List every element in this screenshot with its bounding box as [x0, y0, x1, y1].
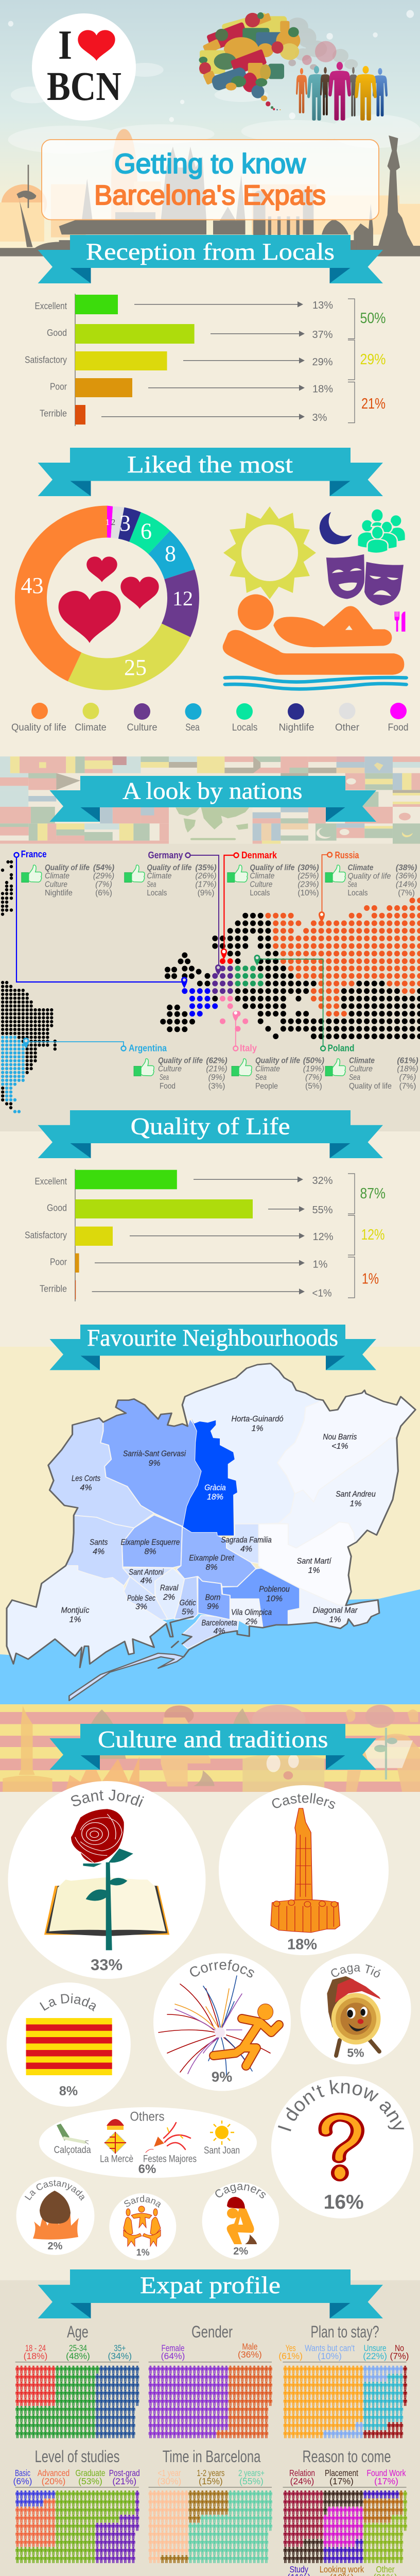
- panel: Sant Jordi: Sant Jordi: [71, 1790, 144, 1807]
- bar chart: reception from locals: Good: [47, 328, 67, 338]
- callout: Poland: Culture: [349, 1064, 373, 1074]
- map labels: 4%: [240, 1545, 252, 1554]
- chart: Level of studies: (6%): [13, 2476, 32, 2486]
- callout: Italy: (5%): [305, 1082, 322, 1091]
- chart: Plan to stay: (22%): [363, 2351, 387, 2361]
- bar chart: quality of life: 87%: [360, 1185, 386, 1202]
- title box: Barcelona's Expats: [94, 180, 326, 211]
- chart: Reason to come: Looking work: [320, 2564, 364, 2574]
- chart: Level of studies: Level of studies: [35, 2447, 119, 2466]
- chart: Level of studies: (20%): [42, 2476, 65, 2486]
- map labels: [61, 1415, 376, 1636]
- chart: Time in Barcelona: (55%): [239, 2476, 264, 2486]
- panel: Correfocs: [153, 1954, 291, 2091]
- callout: Poland: (7%): [399, 1073, 416, 1082]
- callout: Denmark: Locals: [250, 889, 270, 897]
- map labels: 1%: [329, 1615, 341, 1624]
- logo: I love BCN: I: [58, 23, 72, 68]
- callout: France: France: [21, 849, 47, 859]
- chart: Reason to come: (17%): [374, 2476, 398, 2486]
- map labels: 8%: [205, 1563, 218, 1572]
- banner: Reception from Locals: [38, 235, 383, 283]
- title box: Getting to know: [114, 148, 306, 179]
- map labels: 5%: [182, 1608, 194, 1617]
- panel: Others: Festes Majores: [143, 2154, 197, 2165]
- chart: Reason to come: [283, 2447, 407, 2576]
- chart: Age: (18%): [24, 2351, 47, 2361]
- callout: Denmark: (25%): [297, 872, 319, 880]
- map labels: 1%: [251, 1424, 264, 1433]
- callout: Russia: (14%): [396, 880, 417, 889]
- map: sea water: [0, 1589, 420, 1704]
- chart: Plan to stay: Wants but can't: [305, 2343, 355, 2353]
- bar chart: quality of life: <1%: [312, 1288, 332, 1299]
- panel: Sardana: [109, 2193, 176, 2260]
- legend: liked the most: Quality of life: [11, 722, 66, 733]
- chart: Level of studies: Advanced: [38, 2468, 69, 2478]
- donut chart: liked the most: [15, 505, 199, 690]
- map labels: Eixample Esquerre: [120, 1538, 180, 1547]
- chart: Gender: (36%): [238, 2349, 262, 2360]
- panel: Others: La Mercè: [100, 2154, 133, 2165]
- chart: Gender: Female: [162, 2343, 184, 2353]
- banner: Expat profile: [38, 2269, 383, 2318]
- chart: Reason to come: Study: [289, 2564, 308, 2574]
- bar chart: reception from locals: Terrible: [40, 409, 67, 419]
- chart: Plan to stay: (61%): [278, 2351, 303, 2361]
- callout: Denmark: (23%): [297, 880, 319, 889]
- map labels: Nou Barris: [323, 1433, 357, 1442]
- panel: La Castanyada: 2%: [48, 2241, 63, 2252]
- bar chart: quality of life: 55%: [312, 1205, 333, 1216]
- chart: Level of studies: [13, 2447, 140, 2563]
- panel: Sant Jordi: 33%: [91, 1956, 122, 1974]
- legend: liked the most: Other: [335, 722, 360, 733]
- banner: Liked the most: [38, 448, 383, 496]
- chart: Age: (34%): [108, 2351, 132, 2361]
- legend: liked the most: Climate: [75, 722, 107, 733]
- map labels: <1%: [331, 1442, 348, 1451]
- panel: Others: Others: [130, 2110, 165, 2124]
- donut chart: liked the most: 12: [172, 587, 193, 610]
- chart: Level of studies: Post-grad: [109, 2468, 140, 2478]
- chart: Reason to come: (24%): [290, 2476, 314, 2486]
- panel: Others: 6%: [138, 2162, 156, 2176]
- map labels: Sants: [90, 1538, 108, 1547]
- donut chart: liked the most: 8: [165, 541, 176, 566]
- callout: Russia: Locals: [348, 889, 368, 897]
- map labels: Eixample Dret: [189, 1554, 234, 1563]
- chart: Time in Barcelona: (15%): [199, 2476, 223, 2486]
- chart: Time in Barcelona: 2 years+: [238, 2468, 265, 2478]
- chart: Reason to come: Relation: [289, 2468, 315, 2478]
- map labels: 10%: [266, 1595, 283, 1603]
- bar chart: quality of life: Satisfactory: [25, 1230, 67, 1240]
- chart: Time in Barcelona: Time in Barcelona: [163, 2447, 260, 2466]
- panel: La Castanyada: La Castanyada: [25, 2180, 84, 2201]
- bar chart: reception from locals: 37%: [312, 329, 333, 341]
- panel: I don't know any: I don't know any: [278, 2080, 405, 2131]
- chart: Reason to come: Placement: [325, 2468, 358, 2478]
- map labels: 9%: [148, 1459, 161, 1468]
- callout: Argentina: Argentina: [129, 1043, 167, 1054]
- callout: France: Nightlife: [45, 889, 73, 897]
- banner: Culture and traditions: Culture and traditions: [98, 1726, 328, 1753]
- chart: Age: 35+: [114, 2343, 126, 2353]
- panel: Sardana: Sardana: [124, 2195, 161, 2208]
- callout: Poland: Quality of life: [349, 1082, 392, 1091]
- callout: Italy: People: [255, 1082, 278, 1091]
- panel: Caganers: 2%: [233, 2246, 248, 2257]
- callout: Argentina: Food: [160, 1082, 176, 1091]
- chart: Plan to stay: Yes: [286, 2343, 296, 2353]
- callout: Germany: Quality of life: [147, 863, 192, 872]
- callout: Argentina: Sea: [160, 1073, 169, 1082]
- banner: Favourite Neighbourhoods: [49, 1325, 376, 1370]
- callout: Argentina: Culture: [158, 1064, 182, 1074]
- panel: Caganers: [202, 2180, 279, 2260]
- callout: Italy: (50%): [303, 1056, 324, 1065]
- chart: Level of studies: Graduate: [75, 2468, 105, 2478]
- map labels: Montjuïc: [61, 1606, 90, 1615]
- map labels: Sant Antoni: [129, 1568, 164, 1577]
- callout: Russia: (38%): [396, 863, 417, 872]
- callout: Italy: Italy: [240, 1043, 257, 1054]
- bar chart: quality of life: 1%: [313, 1259, 328, 1270]
- chart: Gender: Gender: [191, 2323, 233, 2341]
- callout: Denmark: Denmark: [241, 850, 277, 860]
- callout: Poland: (61%): [397, 1056, 418, 1065]
- map labels: Gótic: [179, 1599, 196, 1607]
- bar chart: quality of life: Terrible: [40, 1283, 67, 1294]
- panel: Castellers: 18%: [287, 1937, 317, 1953]
- map labels: Barceloneta: [202, 1619, 237, 1628]
- map labels: Les Corts: [72, 1474, 100, 1483]
- bar chart: quality of life: 1%: [362, 1271, 379, 1287]
- callout: Russia: (36%): [396, 872, 417, 880]
- callout: Poland: (7%): [399, 1082, 416, 1091]
- map: Barcelona neighbourhoods: [7, 1364, 415, 1701]
- banner: Quality of Life: [38, 1110, 383, 1158]
- callout: Italy: [232, 1011, 324, 1091]
- bar chart: quality of life: 12%: [361, 1227, 385, 1243]
- banner: Reception from Locals: Reception from Locals: [86, 239, 335, 265]
- bar chart: quality of life: [25, 1169, 386, 1301]
- chart: Time in Barcelona: (30%): [157, 2476, 181, 2486]
- map labels: Sagrada Familia: [221, 1536, 272, 1545]
- map labels: 3%: [135, 1603, 147, 1612]
- callout: France: (7%): [95, 880, 112, 889]
- callout: France: (54%): [93, 863, 114, 872]
- callout: Argentina: Quality of life: [158, 1056, 203, 1065]
- title box: [42, 140, 379, 219]
- callout: Poland: (18%): [397, 1064, 418, 1074]
- map labels: 2%: [163, 1593, 175, 1602]
- chart: Time in Barcelona: <1 year: [157, 2468, 181, 2478]
- callout: Italy: Sea: [255, 1073, 267, 1082]
- banner: Culture and traditions: [49, 1724, 376, 1770]
- panel: Others: Sant Joan: [204, 2145, 240, 2156]
- map labels: Sant Martí: [297, 1557, 332, 1566]
- chart: Plan to stay: No: [395, 2343, 404, 2353]
- callout: Germany: (26%): [195, 872, 217, 880]
- map labels: Born: [205, 1594, 220, 1602]
- callout: Germany: Germany: [148, 850, 183, 860]
- map labels: 18%: [207, 1493, 223, 1502]
- chart: Gender: Male: [242, 2342, 257, 2352]
- map labels: Sarrià-Sant Gervasi: [123, 1450, 186, 1459]
- callout: Russia: Quality of life: [348, 872, 391, 881]
- callout: Germany: (17%): [195, 880, 217, 889]
- callout: France: Culture: [45, 880, 67, 889]
- callout: Denmark: Culture: [250, 880, 273, 889]
- donut chart: liked the most: 6: [141, 518, 152, 544]
- crowd of people icons: [296, 62, 388, 121]
- panel: Castellers: [219, 1785, 389, 1955]
- icon: sun: [223, 506, 316, 599]
- bar chart: reception from locals: 21%: [361, 396, 386, 412]
- panel: La Diada: 8%: [59, 2084, 78, 2098]
- icon: theatre masks: [326, 554, 404, 606]
- chart: Plan to stay: (10%): [318, 2351, 342, 2361]
- bar chart: quality of life: Good: [47, 1203, 67, 1213]
- callout: Denmark: Climate: [250, 872, 275, 880]
- callout: Russia: Climate: [348, 863, 374, 872]
- chart: Reason to come: Found Work: [366, 2468, 406, 2478]
- icon: group of locals: [357, 509, 406, 553]
- icon: moon: [320, 512, 352, 545]
- icon: sea waves: [225, 677, 406, 689]
- banner: Quality of Life: Quality of Life: [131, 1113, 290, 1140]
- icon: food fork and knife: [395, 612, 405, 632]
- bar chart: quality of life: 12%: [313, 1231, 334, 1243]
- panel: Correfocs: Correfocs: [190, 1960, 254, 1977]
- callout: Argentina: (3%): [208, 1082, 225, 1091]
- bar chart: reception from locals: 3%: [312, 412, 327, 423]
- donut chart: liked the most: 2: [111, 517, 115, 527]
- chart: Level of studies: (21%): [112, 2476, 136, 2486]
- chart: Time in Barcelona: 1-2 years: [197, 2468, 225, 2478]
- callout: Germany: (9%): [198, 889, 214, 897]
- chart: Gender: (64%): [161, 2351, 185, 2361]
- callout: Italy: Climate: [255, 1064, 280, 1074]
- callout: Denmark: [221, 850, 319, 959]
- callout: Russia: Sea: [348, 880, 357, 889]
- callout: Denmark: Quality of life: [250, 863, 295, 872]
- chart: Reason to come: Other: [376, 2564, 395, 2574]
- callout: Poland: Poland: [327, 1043, 354, 1054]
- chart: Gender: [148, 2323, 272, 2438]
- callout: Italy: (19%): [303, 1064, 324, 1074]
- chart: Level of studies: (53%): [78, 2476, 102, 2486]
- bar chart: reception from locals: 50%: [360, 310, 386, 327]
- panel: La Castanyada: [16, 2177, 95, 2255]
- bar chart: reception from locals: Excellent: [35, 301, 67, 311]
- map labels: 4%: [213, 1627, 225, 1636]
- banner: Expat profile: Expat profile: [140, 2272, 281, 2299]
- panel: Others: [39, 2107, 257, 2178]
- map labels: 1%: [308, 1566, 320, 1575]
- map labels: 4%: [80, 1484, 92, 1493]
- culture band: Catalan stripes: [0, 1704, 420, 1792]
- callout: Italy: (7%): [305, 1073, 322, 1082]
- callout: Russia: (7%): [398, 889, 415, 897]
- map labels: Horta-Guinardó: [232, 1415, 284, 1423]
- donut chart: liked the most: 1: [106, 517, 110, 527]
- icon: sunbather on lounger: [223, 595, 404, 675]
- callout: Poland: Sea: [349, 1073, 360, 1082]
- speech bubble cloud: [199, 12, 358, 110]
- panel: I don't know any: [271, 2076, 413, 2218]
- callout: Germany: (35%): [195, 863, 217, 872]
- bar chart: quality of life: Poor: [50, 1257, 67, 1267]
- chart: Plan to stay: (7%): [390, 2351, 409, 2361]
- panel: Others: Calçotada: [54, 2145, 91, 2156]
- panel: I don't know any: 16%: [324, 2191, 364, 2213]
- bar chart: quality of life: 32%: [312, 1175, 333, 1187]
- map labels: Gràcia: [204, 1484, 226, 1493]
- logo: I love BCN: [32, 13, 136, 121]
- callout: France: Climate: [45, 872, 69, 880]
- donut chart: liked the most: 3: [119, 511, 131, 536]
- map labels: 9%: [207, 1602, 219, 1611]
- callout: Germany: [125, 850, 221, 975]
- chart: Age: [15, 2323, 139, 2438]
- map labels: 1%: [69, 1615, 81, 1624]
- legend: liked the most: Nightlife: [279, 722, 314, 733]
- panel: Caga Tió: 5%: [347, 2046, 364, 2060]
- logo: I love BCN: BCN: [47, 64, 121, 109]
- legend: liked the most: Food: [388, 722, 409, 733]
- callout: Germany: Sea: [147, 880, 156, 889]
- panel: La Diada: La Diada: [40, 1993, 96, 2011]
- legend: liked the most: Locals: [232, 722, 257, 733]
- callout: Germany: Locals: [147, 889, 167, 897]
- banner: A look by nations: A look by nations: [122, 778, 303, 805]
- chart: Age: 18 - 24: [25, 2343, 46, 2353]
- dot map: world dots: [3, 862, 420, 1112]
- map labels: Diagonal Mar: [313, 1606, 358, 1615]
- callout: France: (29%): [93, 872, 114, 880]
- bar chart: reception from locals: Satisfactory: [25, 355, 67, 365]
- panel: Caganers: Caganers: [215, 2183, 266, 2198]
- flags background band: [0, 756, 420, 844]
- panel: Castellers: Castellers: [272, 1793, 336, 1809]
- chart: Age: Age: [67, 2323, 89, 2341]
- chart: Plan to stay: [278, 2323, 409, 2438]
- chart: Age: 25-34: [69, 2343, 87, 2353]
- callout: Denmark: (30%): [297, 863, 319, 872]
- panel: Sardana: 1%: [136, 2247, 150, 2258]
- banner: Favourite Neighbourhoods: Favourite Neighbourhoods: [87, 1325, 338, 1351]
- callout: Argentina: (9%): [208, 1073, 225, 1082]
- callout: Denmark: (10%): [297, 889, 319, 897]
- map labels: 4%: [140, 1577, 152, 1585]
- map labels: 2%: [245, 1618, 257, 1626]
- callout: Italy: Quality of life: [255, 1056, 300, 1065]
- legend: liked the most: Culture: [127, 722, 157, 733]
- skyline and clouds background: [0, 10, 420, 257]
- bar chart: reception from locals: 29%: [312, 357, 333, 368]
- callout: Argentina: [23, 1038, 227, 1091]
- bar chart: reception from locals: 13%: [312, 300, 333, 311]
- map labels: 1%: [349, 1499, 362, 1508]
- map labels: Raval: [160, 1584, 179, 1592]
- bar chart: reception from locals: Poor: [50, 382, 67, 392]
- legend: liked the most: [11, 703, 409, 733]
- panel: La Diada: [7, 1982, 131, 2107]
- chart: Plan to stay: Unsure: [364, 2343, 387, 2353]
- callout: Argentina: (62%): [206, 1056, 227, 1065]
- callout: Germany: Climate: [147, 872, 172, 880]
- callout: France: [14, 849, 187, 988]
- chart: Reason to come: (17%): [329, 2476, 354, 2486]
- donut chart: liked the most: 43: [21, 573, 43, 598]
- chart: Age: (48%): [66, 2351, 90, 2361]
- callout: France: (6%): [95, 889, 112, 897]
- banner: Liked the most: Liked the most: [127, 451, 293, 478]
- map labels: Poblenou: [259, 1585, 290, 1594]
- callout: Poland: [254, 955, 418, 1091]
- donut chart: liked the most: 25: [124, 655, 147, 680]
- panel: Sant Jordi: [8, 1781, 206, 1979]
- map labels: Sant Andreu: [336, 1490, 376, 1499]
- legend: liked the most: Sea: [185, 722, 200, 733]
- map labels: 8%: [144, 1548, 156, 1556]
- callout: France: Quality of life: [45, 863, 90, 872]
- bar chart: reception from locals: 29%: [360, 351, 386, 368]
- bar chart: quality of life: Excellent: [35, 1176, 67, 1187]
- chart: Plan to stay: Plan to stay?: [311, 2323, 379, 2341]
- bar chart: reception from locals: 18%: [312, 383, 333, 395]
- map labels: 4%: [93, 1548, 104, 1556]
- callout: Russia: Russia: [335, 850, 359, 860]
- callout: Poland: Climate: [349, 1056, 375, 1065]
- panel: Correfocs: 9%: [212, 2069, 232, 2085]
- callout: Argentina: (21%): [206, 1064, 227, 1074]
- panel: Caga Tió: Caga Tió: [331, 1964, 381, 1977]
- bar chart: reception from locals: [25, 294, 386, 426]
- map labels: Vila Olimpica: [231, 1608, 272, 1617]
- banner: A look by nations: [49, 776, 376, 822]
- chart: Level of studies: Basic: [15, 2468, 30, 2478]
- chart: Reason to come: Reason to come: [303, 2447, 391, 2466]
- callout: Russia: [319, 850, 417, 922]
- panel: Caga Tió: [301, 1954, 411, 2064]
- map labels: Poble Sec: [127, 1594, 155, 1603]
- chart: Time in Barcelona: [148, 2447, 272, 2563]
